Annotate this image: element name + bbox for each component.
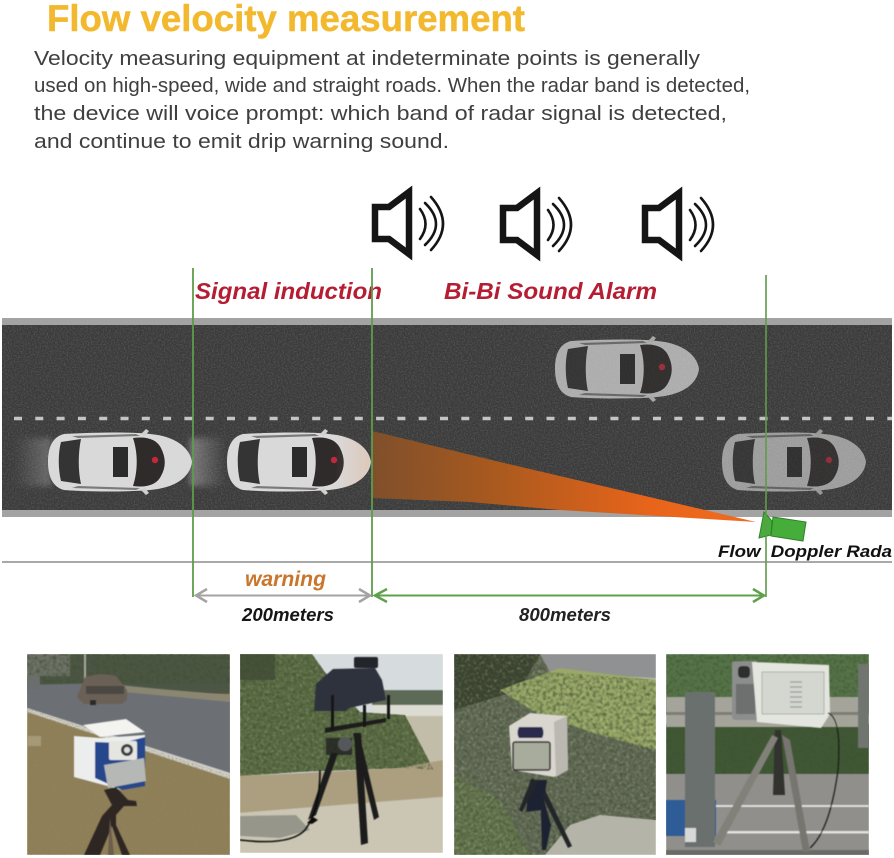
car: upper lane car bbox=[555, 336, 699, 402]
ground line bbox=[2, 561, 892, 563]
arrow: 200 meters bbox=[196, 589, 370, 602]
car: moving car bbox=[48, 429, 192, 495]
label: bi-bi sound alarm: Bi-Bi Sound Alarm bbox=[444, 278, 657, 304]
radar beam bbox=[372, 431, 756, 522]
icon: speaker 2 bbox=[503, 193, 571, 255]
road surface bbox=[2, 318, 892, 517]
label: 800 meters: 800meters bbox=[519, 605, 611, 625]
text block: description: Velocity measuring equipment at indeterminate points is generally bbox=[34, 48, 700, 70]
car: car in detection zone bbox=[227, 429, 371, 495]
car: motion trail bbox=[15, 438, 226, 486]
arrow: 800 meters bbox=[375, 589, 764, 602]
photo 1: device on grass by roadside bbox=[27, 654, 230, 855]
radar device bbox=[759, 512, 806, 541]
icon: speaker 1 bbox=[375, 192, 443, 254]
glow on car nose bbox=[335, 434, 371, 490]
text block: description: and continue to emit drip warning sound. bbox=[34, 131, 449, 153]
photo 3: compact device among shrubs bbox=[454, 654, 656, 855]
icon: speaker 3 bbox=[645, 193, 713, 255]
text block: description: used on high-speed, wide and straight roads. When the radar band is detected, bbox=[34, 75, 750, 97]
photo 2: dark device on tripod by planter bbox=[240, 654, 443, 853]
zone boundary lines bbox=[193, 268, 766, 597]
label: warning: warning bbox=[245, 568, 326, 591]
photo 4: white enclosure at guardrail bbox=[666, 654, 869, 855]
road diagram bbox=[2, 318, 892, 563]
car: car past radar bbox=[722, 429, 866, 495]
text block: description: the device will voice prompt: which band of radar signal is detected, bbox=[34, 103, 727, 125]
label: signal induction: Signal induction bbox=[195, 278, 382, 304]
lane divider bbox=[14, 417, 892, 420]
label: 200 meters: 200meters bbox=[241, 605, 334, 625]
label: flow doppler radar: Flow Doppler Rada bbox=[718, 542, 892, 561]
text block: description bbox=[34, 48, 750, 153]
